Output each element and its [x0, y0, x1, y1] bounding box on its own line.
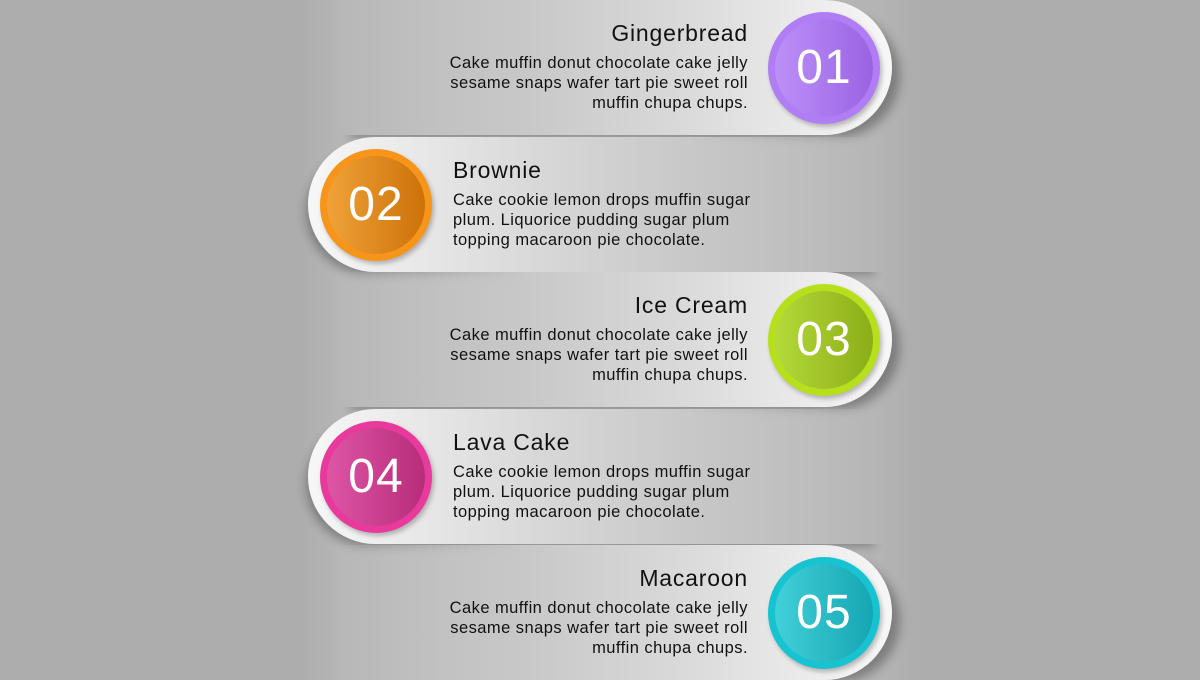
- text: Ice Cream: Ice Cream: [635, 292, 748, 318]
- item 4: Lava Cake: [308, 409, 888, 544]
- text: Gingerbread: [450, 20, 748, 112]
- text: Gingerbread: Gingerbread: [611, 20, 748, 46]
- text: Macaroon: sesame snaps wafer tart pie sweet roll: [450, 619, 748, 637]
- text: Ice Cream: muffin chupa chups.: [592, 366, 748, 384]
- text: Macaroon: muffin chupa chups.: [592, 639, 748, 657]
- text: Ice Cream: sesame snaps wafer tart pie sweet roll: [450, 346, 748, 364]
- icon: number 02: 02: [348, 178, 404, 231]
- text: Gingerbread: Cake muffin donut chocolate cake jelly: [450, 54, 748, 72]
- icon: number 05: 05: [796, 586, 852, 639]
- text: Macaroon: [450, 565, 748, 657]
- icon: number 03: 03: [796, 313, 852, 366]
- icon: number 04: [320, 421, 432, 533]
- item 5: Macaroon: [330, 545, 892, 680]
- text: Gingerbread: sesame snaps wafer tart pie sweet roll: [450, 74, 748, 92]
- text: Brownie: [453, 157, 750, 249]
- text: Gingerbread: muffin chupa chups.: [592, 94, 748, 112]
- icon: number 01: 01: [796, 41, 852, 94]
- icon: number 02: [320, 149, 432, 261]
- item 1: Gingerbread: [330, 0, 892, 135]
- text: Lava Cake: plum. Liquorice pudding sugar plum: [453, 483, 730, 501]
- text: Brownie: Cake cookie lemon drops muffin sugar: [453, 191, 750, 209]
- text: Ice Cream: Cake muffin donut chocolate cake jelly: [450, 326, 748, 344]
- icon: number 04: 04: [348, 450, 404, 503]
- icon: number 03: [768, 284, 880, 396]
- text: Brownie: topping macaroon pie chocolate.: [453, 231, 705, 249]
- item 2: Brownie: [308, 137, 888, 272]
- icon: number 05: [768, 557, 880, 669]
- text: Ice Cream: [450, 292, 748, 384]
- item 3: Ice Cream: [330, 272, 892, 407]
- text: Brownie: Brownie: [453, 157, 542, 183]
- text: Lava Cake: Cake cookie lemon drops muffin sugar: [453, 463, 750, 481]
- text: Brownie: plum. Liquorice pudding sugar plum: [453, 211, 730, 229]
- text: Lava Cake: [453, 429, 750, 521]
- text: Lava Cake: Lava Cake: [453, 429, 570, 455]
- icon: number 01: [768, 12, 880, 124]
- text: Macaroon: Macaroon: [639, 565, 748, 591]
- text: Lava Cake: topping macaroon pie chocolate.: [453, 503, 705, 521]
- text: Macaroon: Cake muffin donut chocolate cake jelly: [450, 599, 748, 617]
